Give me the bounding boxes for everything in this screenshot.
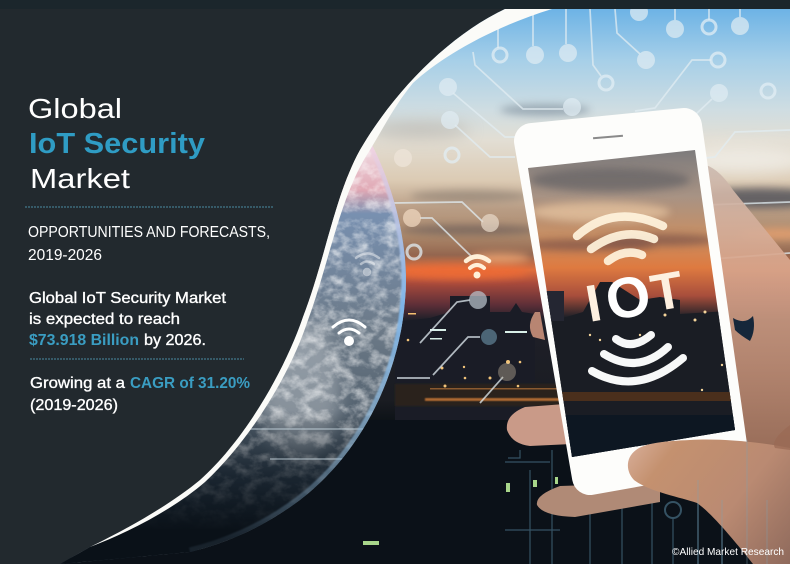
lower palm shading	[774, 425, 790, 450]
phone	[515, 126, 750, 477]
icon: wifi on globe	[333, 320, 365, 344]
cagr statement: (2019-2026)	[30, 397, 118, 414]
subtitle: 2019-2026	[28, 247, 102, 264]
circuit lines	[393, 9, 790, 403]
icon: wifi over sunset	[466, 256, 489, 278]
title: Market	[30, 163, 130, 194]
market size statement: Global IoT Security Market	[29, 290, 227, 307]
iot label on screen	[586, 270, 680, 322]
title: Global	[28, 93, 122, 124]
icon: faint wifi on globe	[356, 254, 379, 275]
sky and sunset	[308, 9, 790, 420]
thumb	[628, 439, 790, 564]
market size statement	[29, 290, 227, 349]
cagr statement: CAGR of 31.20%	[130, 375, 250, 392]
grid lines over hand	[698, 440, 767, 564]
screen skyline	[546, 282, 735, 457]
icon: wifi top on screen	[577, 217, 663, 261]
cagr statement: Growing at a	[30, 375, 125, 392]
city skyline and lights	[363, 296, 559, 545]
market size statement: by 2026.	[144, 332, 206, 349]
hand	[706, 165, 790, 470]
phone speaker	[593, 135, 623, 139]
iot label on screen: T	[646, 261, 688, 323]
icon: wifi bottom on screen	[592, 335, 683, 381]
fingers behind phone	[507, 312, 660, 517]
cagr statement	[30, 375, 250, 414]
iot label on screen: I	[582, 274, 606, 334]
circuit nodes	[394, 3, 749, 381]
market size statement: $73.918 Billion	[29, 332, 139, 349]
subtitle: OPPORTUNITIES AND FORECASTS,	[28, 224, 270, 241]
top dark strip	[0, 0, 790, 9]
iot label on screen: O	[601, 263, 656, 333]
earth globe	[60, 140, 420, 564]
subtitle	[28, 224, 270, 264]
finger shadow	[733, 316, 754, 341]
source credit: ©Allied Market Research	[672, 546, 784, 558]
white curved divider	[90, 9, 552, 547]
title	[28, 93, 205, 194]
bottom background grid	[505, 450, 722, 564]
market size statement: is expected to reach	[29, 311, 180, 328]
title: IoT Security	[29, 128, 205, 160]
phone screen	[528, 150, 735, 457]
